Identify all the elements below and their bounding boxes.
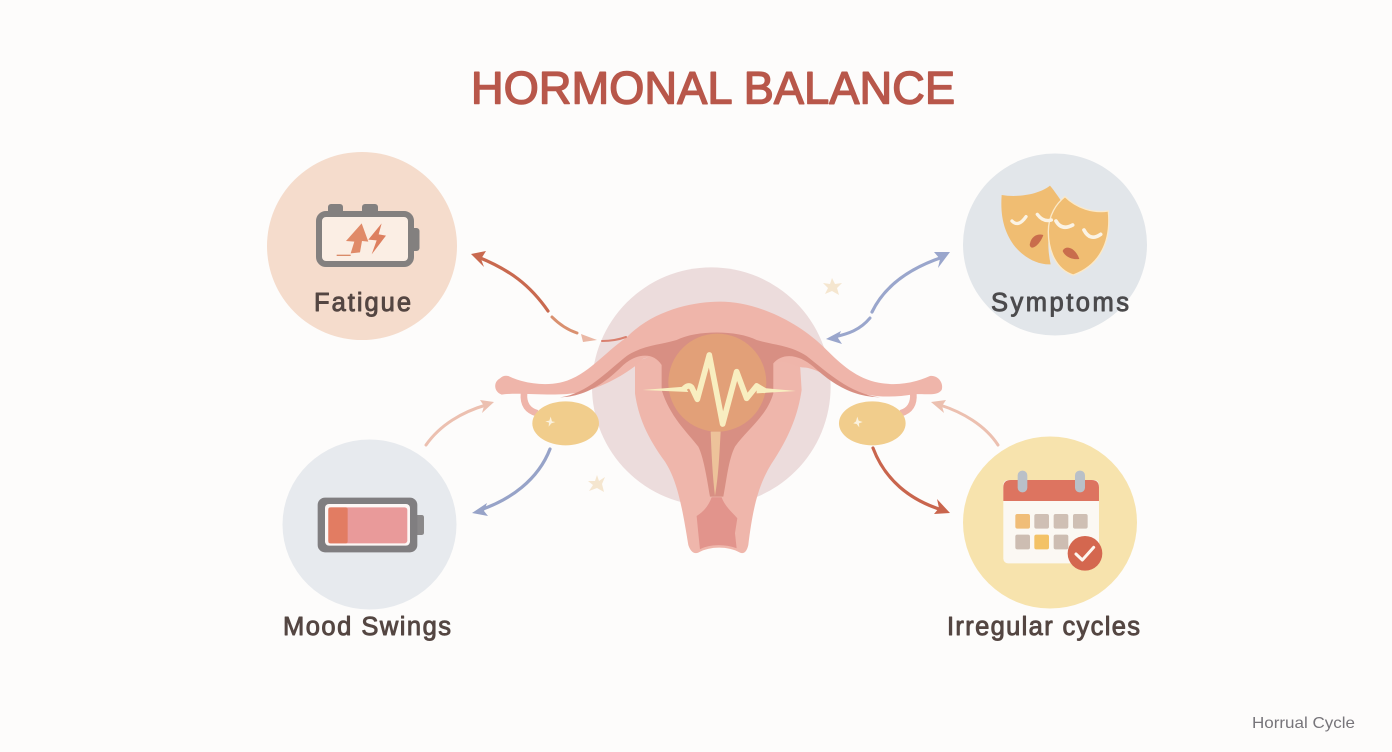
panel: symptoms xyxy=(963,154,1147,336)
symptoms label: Symptoms xyxy=(991,289,1129,317)
irregular cycles circle xyxy=(963,436,1137,608)
panel: mood swings xyxy=(282,440,456,641)
ECG heartbeat line xyxy=(643,355,796,424)
cervical canal xyxy=(711,432,721,496)
arrow: to mood swings xyxy=(472,449,550,516)
icon: low battery xyxy=(318,498,424,552)
left ligament xyxy=(524,393,537,413)
icon: theatre masks xyxy=(1001,186,1109,275)
left ovary xyxy=(532,401,599,445)
panel: fatigue xyxy=(267,152,457,340)
arrow: from irregular cycles xyxy=(931,400,998,445)
arrow: to irregular cycles xyxy=(873,448,950,514)
decorative star upper right xyxy=(823,278,842,295)
right ovary xyxy=(839,401,906,445)
footer caption: Horrual Cycle xyxy=(1252,715,1355,732)
symptoms circle xyxy=(963,154,1147,336)
ovary sparkle left xyxy=(545,417,555,427)
inner uterine lining xyxy=(560,332,880,497)
cervix xyxy=(697,497,737,549)
fatigue label: Fatigue xyxy=(314,289,411,317)
central uterus illustration xyxy=(495,267,942,553)
uterine core circle xyxy=(668,334,766,432)
right ligament xyxy=(901,393,913,413)
panel: irregular cycles xyxy=(947,436,1140,641)
ovary sparkle right xyxy=(853,417,863,427)
icon: calendar with check xyxy=(1003,471,1102,571)
mood swings label: Mood Swings xyxy=(283,613,451,641)
icon: charged battery with bolts xyxy=(319,204,420,264)
mood swings circle xyxy=(282,440,456,610)
decorative star lower left xyxy=(588,475,605,492)
arrow: from mood swings xyxy=(426,400,494,445)
arrow: to symptoms xyxy=(826,252,950,344)
title: HORMONAL BALANCE xyxy=(471,62,955,114)
background halo circle xyxy=(592,267,831,506)
arrow: to fatigue xyxy=(471,251,626,342)
tubes and dome xyxy=(495,302,942,397)
uterus body xyxy=(635,351,802,553)
fatigue circle xyxy=(267,152,457,340)
irregular cycles label: Irregular cycles xyxy=(947,613,1140,641)
